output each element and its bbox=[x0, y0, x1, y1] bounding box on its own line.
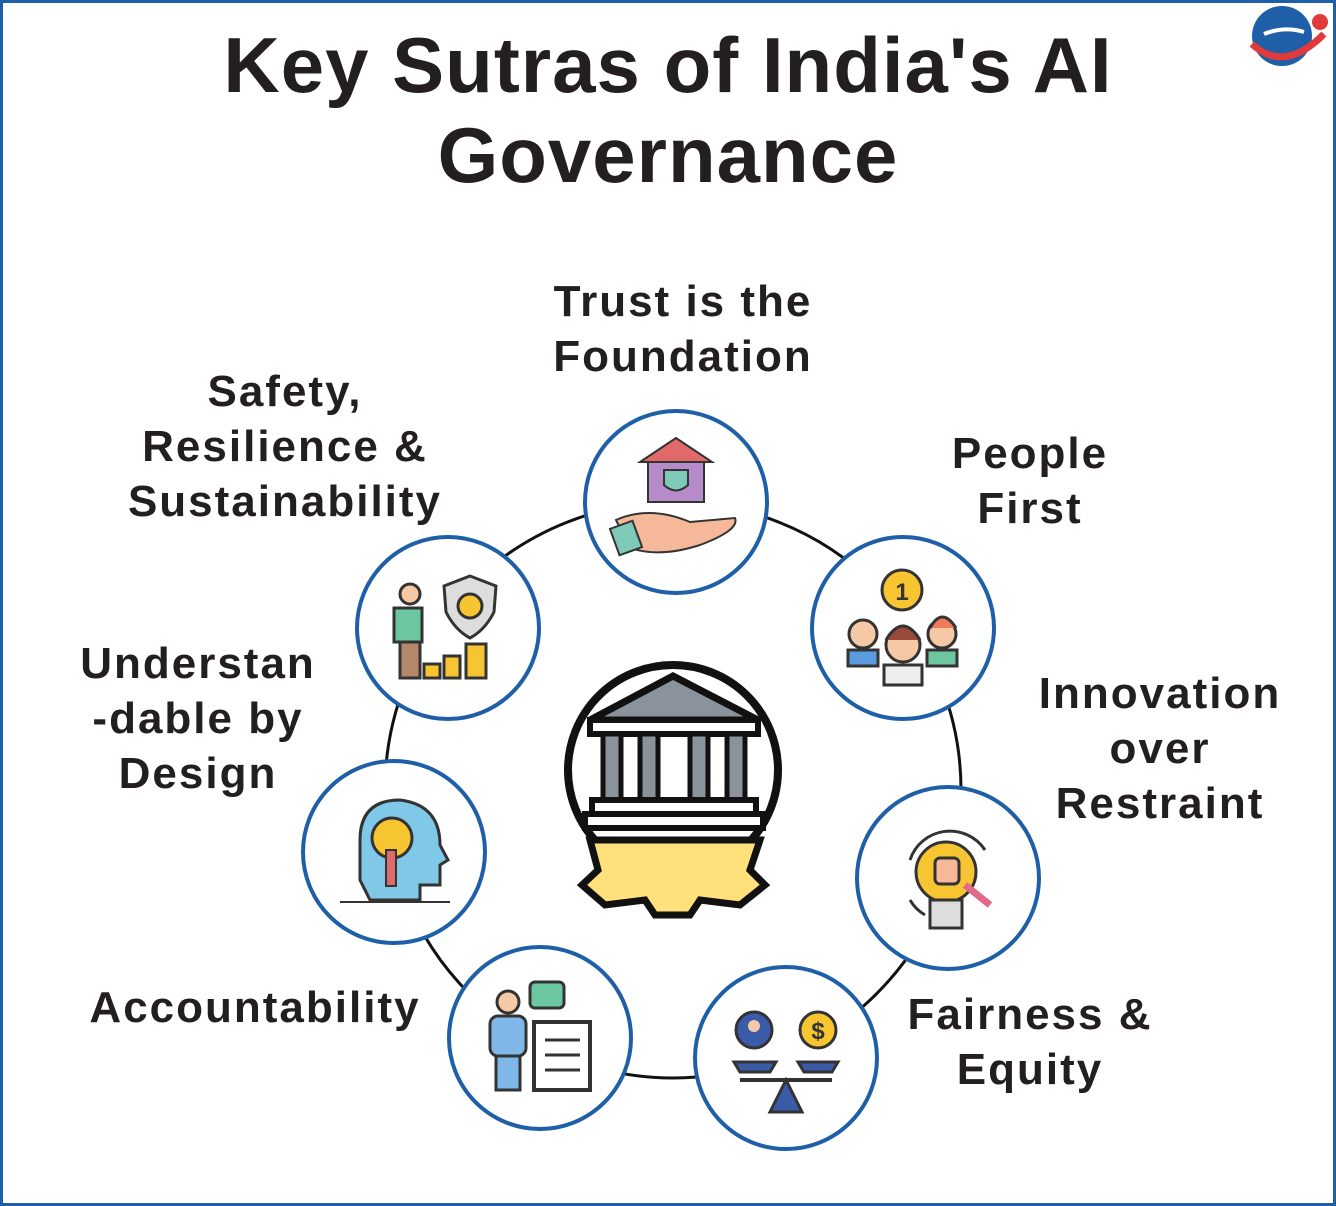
label: trust bbox=[553, 277, 813, 381]
label: understandable: Design bbox=[119, 749, 277, 798]
label: trust: Foundation bbox=[553, 332, 813, 381]
label: trust: Trust is the bbox=[554, 277, 812, 326]
label: understandable bbox=[80, 639, 316, 798]
node: innovation bbox=[857, 787, 1039, 969]
label: innovation bbox=[1039, 669, 1281, 828]
label: innovation: over bbox=[1110, 724, 1210, 773]
node: people bbox=[812, 537, 994, 719]
label: understandable: -dable by bbox=[92, 694, 304, 743]
node: trust bbox=[585, 411, 767, 593]
label: safety: Sustainability bbox=[128, 477, 442, 526]
node: accountability bbox=[449, 947, 631, 1129]
label: safety: Resilience & bbox=[142, 422, 428, 471]
title: Key Sutras of India's AI bbox=[223, 21, 1113, 109]
label: people first: First bbox=[977, 484, 1083, 533]
label: understandable: Understan bbox=[80, 639, 316, 688]
logo bbox=[1250, 6, 1328, 66]
label: fairness bbox=[908, 990, 1152, 1094]
label: people first bbox=[952, 429, 1108, 533]
label: innovation: Restraint bbox=[1056, 779, 1264, 828]
title: Governance bbox=[438, 111, 898, 199]
label: innovation: Innovation bbox=[1039, 669, 1281, 718]
node: fairness: $ bbox=[811, 1018, 825, 1045]
node: safety bbox=[357, 537, 539, 719]
label: fairness: Equity bbox=[957, 1045, 1103, 1094]
node: fairness bbox=[695, 967, 877, 1149]
label: fairness: Fairness & bbox=[908, 990, 1152, 1039]
title bbox=[223, 21, 1113, 199]
label: safety bbox=[128, 367, 442, 526]
node: people: 1 bbox=[895, 579, 909, 606]
label: safety: Safety, bbox=[207, 367, 363, 416]
label: accountability: Accountability bbox=[89, 983, 421, 1032]
label: people first: People bbox=[952, 429, 1108, 478]
node: understandable bbox=[303, 761, 485, 943]
central icon bbox=[568, 665, 778, 915]
